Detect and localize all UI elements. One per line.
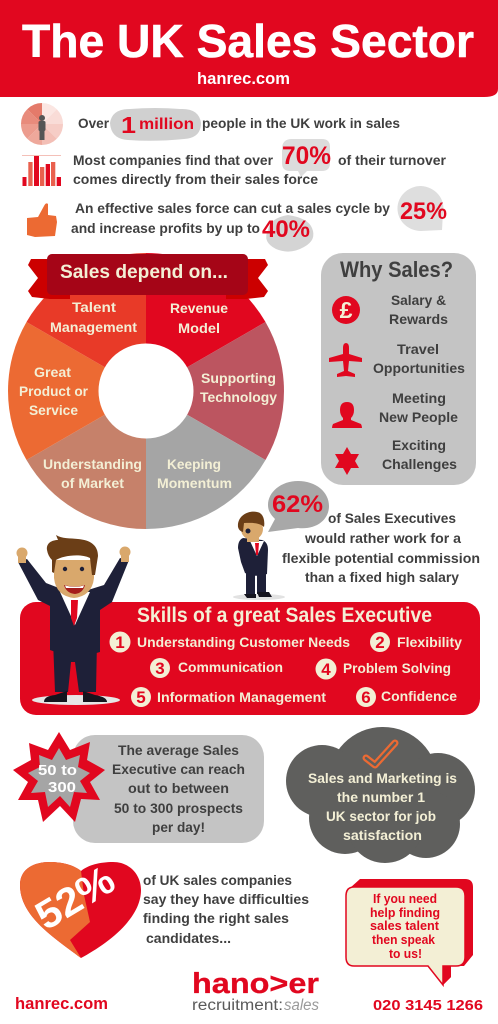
stat: 70% of turnover bbox=[22, 139, 447, 187]
text: travel opportunities: Opportunities bbox=[373, 360, 465, 376]
heart: 52%: 52% bbox=[28, 858, 123, 939]
callout: speak to us: sales talent bbox=[370, 919, 440, 933]
label: revenue model bbox=[170, 300, 228, 336]
text: exciting challenges bbox=[382, 437, 457, 472]
badge: 50 to 300 star: 300 bbox=[48, 779, 76, 796]
label: great product or service bbox=[19, 364, 89, 418]
text: sales and marketing: the number 1 bbox=[337, 789, 425, 805]
skill 2: 2 bbox=[375, 633, 385, 652]
callout: speak to us: to us! bbox=[389, 947, 422, 961]
text: sales candidates: candidates... bbox=[146, 930, 231, 946]
logo: hanover recruitment sales bbox=[192, 968, 319, 1014]
segment: talent management bbox=[26, 253, 146, 391]
heading ribbon: sales depend on bbox=[28, 254, 268, 299]
figure: 1 million: million bbox=[139, 116, 194, 133]
bubble: 25% bbox=[397, 186, 447, 231]
panel: prospects per day: per day! bbox=[152, 819, 205, 835]
label: understanding of market: of Market bbox=[61, 475, 124, 491]
label: great product or service: Service bbox=[29, 402, 78, 418]
logo: hanover recruitment sales: sales bbox=[284, 997, 319, 1014]
label: supporting technology: Supporting bbox=[201, 370, 276, 386]
speech bubble: 70%: 70% bbox=[282, 142, 331, 170]
stat: 62% commission bbox=[268, 481, 480, 585]
badge: 50 to 300 star: 50 to bbox=[38, 762, 77, 779]
stat: 1 million people bbox=[21, 103, 400, 145]
panel: prospects per day: The average Sales bbox=[118, 742, 239, 758]
skill 6 bbox=[356, 687, 457, 707]
skill 2 bbox=[370, 632, 462, 652]
figure: 1 million: 1 bbox=[121, 112, 136, 138]
figure: 1 million bbox=[121, 112, 194, 138]
stat: 70% of turnover: of their turnover bbox=[338, 152, 447, 168]
callout: speak to us: If you need bbox=[373, 892, 437, 906]
footer website: hanrec.com bbox=[15, 995, 108, 1013]
icon: plane bbox=[329, 343, 362, 377]
label: great product or service: Great bbox=[34, 364, 71, 380]
skill 1: Understanding Customer Needs bbox=[137, 634, 350, 650]
text: exciting challenges: Exciting bbox=[392, 437, 446, 453]
panel: prospects per day: 50 to 300 prospects bbox=[114, 800, 243, 816]
label: keeping momentum: Keeping bbox=[167, 456, 221, 472]
label: talent management: Talent bbox=[72, 299, 116, 315]
text: travel opportunities bbox=[373, 341, 465, 376]
skill 3: 3 bbox=[155, 659, 165, 678]
badge: 50 to 300 star bbox=[13, 732, 105, 822]
footer phone number: 020 3145 1266 bbox=[373, 998, 483, 1014]
text: sales candidates: of UK sales companies bbox=[143, 872, 292, 888]
panel: prospects per day: Executive can reach bbox=[112, 761, 245, 777]
text: commission preference: flexible potential commission bbox=[282, 550, 480, 566]
skill 3 bbox=[150, 658, 283, 678]
callout: speak to us: help finding bbox=[370, 906, 440, 920]
cloud: 40%: 40% bbox=[262, 216, 310, 243]
icon: thumbs up bbox=[27, 203, 57, 237]
label: revenue model: Model bbox=[178, 320, 220, 336]
panel: prospects per day: out to between bbox=[128, 780, 229, 796]
label: talent management bbox=[50, 299, 137, 335]
icon: bar chart bbox=[22, 155, 61, 186]
text: commission preference: of Sales Executives bbox=[328, 510, 456, 526]
heading ribbon: sales depend on: Sales depend on... bbox=[60, 261, 228, 283]
icon: pound bbox=[332, 296, 360, 324]
label: supporting technology: Technology bbox=[200, 389, 277, 405]
label: great product or service: Product or bbox=[19, 383, 89, 399]
text: commission preference: would rather work for a bbox=[304, 530, 461, 546]
text: sales and marketing: Sales and Marketing is bbox=[308, 770, 457, 786]
text: salary and rewards bbox=[389, 292, 448, 327]
label: understanding of market bbox=[43, 456, 142, 491]
text: commission preference: than a fixed high salary bbox=[305, 569, 459, 585]
stat: 70% of turnover: comes directly from their sales force bbox=[73, 171, 318, 187]
text: sales candidates: say they have difficulties bbox=[143, 891, 309, 907]
skill 2: Flexibility bbox=[397, 634, 462, 650]
text: commission preference bbox=[282, 510, 480, 585]
skill 5: Information Management bbox=[157, 689, 326, 705]
text: meeting new people bbox=[379, 390, 458, 425]
stat: 1 million people: Over bbox=[78, 115, 110, 131]
stat: 1 million people: people in the UK work in sales bbox=[202, 115, 400, 131]
figure: celebrating man bbox=[16, 535, 130, 705]
skill 5: 5 bbox=[136, 688, 146, 707]
text: sales and marketing: satisfaction bbox=[343, 827, 422, 843]
stat: 70% of turnover: Most companies find that over bbox=[73, 152, 274, 168]
skill 1 bbox=[110, 632, 350, 652]
segment: revenue model bbox=[146, 253, 266, 391]
chart: sales depend on donut bbox=[8, 253, 284, 529]
cloud: job satisfaction bbox=[286, 727, 475, 863]
icon: person bbox=[332, 402, 362, 428]
skill 3: Communication bbox=[178, 659, 283, 675]
text: salary and rewards: Rewards bbox=[389, 311, 448, 327]
text: sales and marketing: UK sector for job bbox=[326, 808, 436, 824]
segment: understanding of market bbox=[26, 391, 146, 529]
panel: skills of a great sales executive bbox=[20, 602, 480, 715]
skill 1: 1 bbox=[115, 633, 125, 652]
segment: supporting technology bbox=[146, 322, 284, 460]
text: sales candidates bbox=[143, 872, 309, 946]
title: The UK Sales Sector bbox=[22, 15, 474, 67]
text: sales candidates: finding the right sales bbox=[143, 910, 289, 926]
speech bubble: 62%: 62% bbox=[272, 491, 323, 518]
heading: skills: Skills of a great Sales Executive bbox=[137, 604, 432, 627]
stat: sales cycle and profits: An effective sales force can cut a sales cycle by bbox=[75, 200, 390, 216]
header banner bbox=[0, 0, 498, 97]
label: keeping momentum bbox=[157, 456, 232, 491]
skill 6: 6 bbox=[361, 688, 371, 707]
stat: sales cycle and profits: and increase profits by up to bbox=[71, 220, 260, 236]
segment: keeping momentum bbox=[146, 391, 266, 529]
skill 4: Problem Solving bbox=[343, 660, 451, 676]
stat: sales cycle and profits bbox=[27, 186, 447, 252]
logo: hanover recruitment sales: recruitment: bbox=[192, 997, 283, 1014]
icon: star bbox=[335, 447, 359, 475]
text: sales and marketing bbox=[308, 770, 457, 843]
figure: man on phone bbox=[233, 512, 285, 600]
grey blob bbox=[110, 108, 201, 141]
text: exciting challenges: Challenges bbox=[382, 456, 457, 472]
skill 6: Confidence bbox=[381, 688, 457, 704]
label: revenue model: Revenue bbox=[170, 300, 228, 316]
skill 4: 4 bbox=[321, 660, 331, 679]
icon: check mark bbox=[366, 743, 395, 765]
heading: why sales: Why Sales? bbox=[340, 257, 453, 282]
panel: why sales bbox=[321, 253, 476, 485]
label: supporting technology bbox=[200, 370, 277, 405]
label: understanding of market: Understanding bbox=[43, 456, 142, 472]
panel: prospects per day bbox=[73, 735, 264, 843]
logo: hanover recruitment sales: hano>er bbox=[192, 968, 319, 1000]
segment: great product or service bbox=[8, 322, 146, 460]
header website: hanrec.com bbox=[197, 69, 290, 88]
text: meeting new people: New People bbox=[379, 409, 458, 425]
text: meeting new people: Meeting bbox=[392, 390, 446, 406]
icon: pie with person bbox=[21, 103, 63, 145]
skill 5 bbox=[131, 687, 326, 707]
bubble: 25%: 25% bbox=[400, 198, 447, 225]
label: talent management: Management bbox=[50, 319, 137, 335]
text: travel opportunities: Travel bbox=[397, 341, 439, 357]
heart: 52% bbox=[20, 858, 141, 958]
speech bubble: 62% bbox=[268, 481, 329, 532]
cloud: 40% bbox=[262, 215, 313, 252]
text: salary and rewards: Salary & bbox=[391, 292, 446, 308]
icon: pound: £ bbox=[340, 297, 353, 323]
callout: speak to us bbox=[346, 879, 473, 985]
callout: speak to us: then speak bbox=[372, 933, 435, 947]
label: keeping momentum: Momentum bbox=[157, 475, 232, 491]
skill 4 bbox=[316, 658, 451, 680]
